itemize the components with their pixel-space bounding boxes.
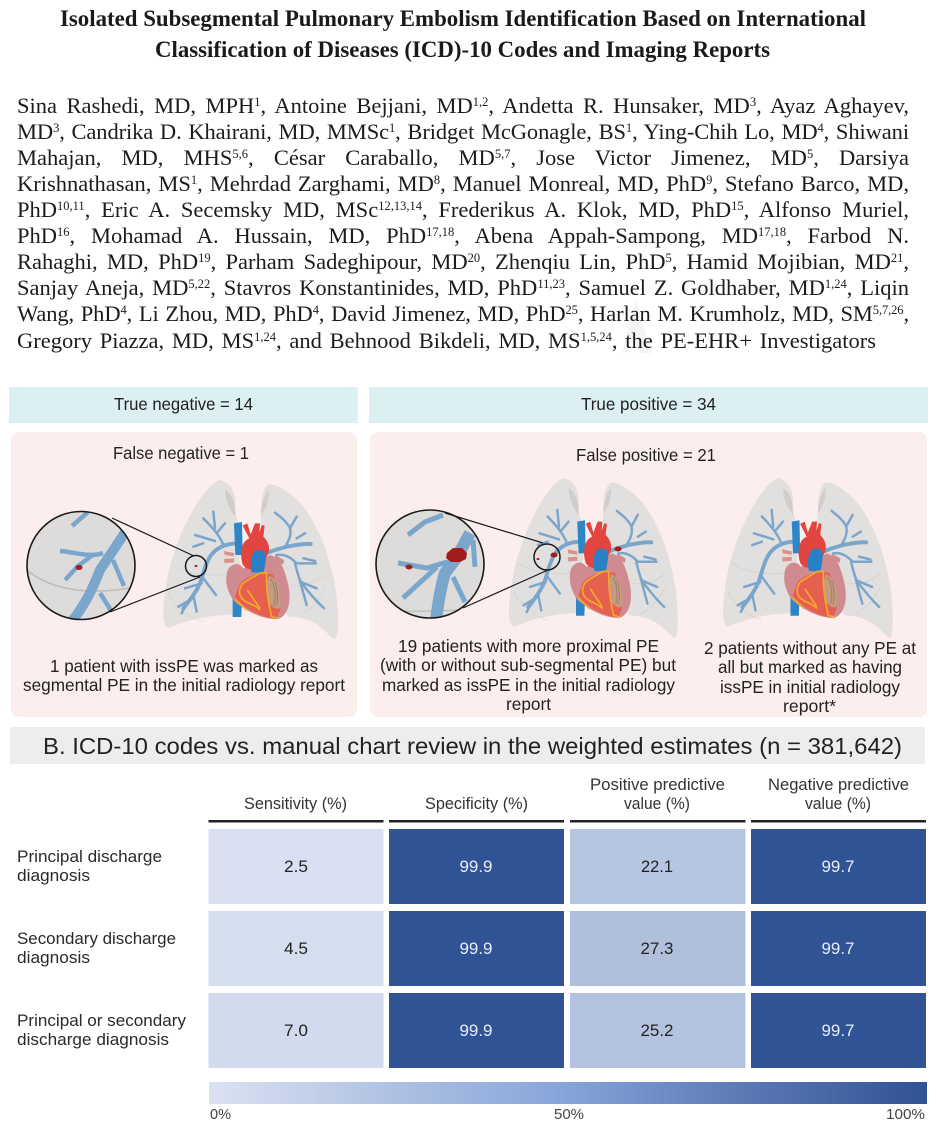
row: principal or secondary discharge diagnosis: 7.0 bbox=[284, 1022, 308, 1040]
caption: 19 patients: 19 patients with more proximal PE bbox=[398, 636, 659, 656]
column headers: Specificity (%) bbox=[425, 795, 528, 813]
row: principal discharge diagnosis: 99.9 bbox=[460, 858, 492, 876]
false negative caption bbox=[23, 656, 345, 695]
author list: Mahajan, MD, MHS5,6, César Caraballo, MD5,7, Jose Victor Jimenez, MD5, Darsiya bbox=[17, 145, 909, 170]
row: secondary discharge diagnosis: 27.3 bbox=[640, 940, 674, 958]
author list: Krishnathasan, MS1, Mehrdad Zarghami, MD8, Manuel Monreal, MD, PhD9, Stefano Barco, MD, bbox=[17, 171, 909, 196]
row: principal discharge diagnosis: 99.7 bbox=[822, 858, 854, 876]
icon: lungs and heart with proximal clots bbox=[509, 478, 678, 637]
heading: section B bbox=[10, 727, 925, 764]
author list: PhD10,11, Eric A. Secemsky MD, MSc12,13,14, Frederikus A. Klok, MD, PhD15, Alfonso Muriel, bbox=[17, 197, 909, 222]
column headers: Sensitivity (%) bbox=[244, 795, 347, 813]
row: principal discharge diagnosis: 2.5 bbox=[284, 858, 308, 876]
panel: true negative banner bbox=[9, 387, 358, 423]
column headers: value (%) bbox=[624, 795, 690, 813]
caption: 2 patients: all but marked as having bbox=[718, 657, 902, 677]
icon: lungs and heart without embolism bbox=[723, 478, 893, 637]
caption: 2 patients: issPE in initial radiology bbox=[720, 677, 900, 697]
false negative caption: 1 patient with issPE was marked as bbox=[50, 656, 318, 676]
row: principal or secondary discharge diagnosis: 99.9 bbox=[460, 1022, 492, 1040]
icon: lungs and heart bbox=[163, 480, 338, 639]
panel: false positive bbox=[370, 432, 927, 717]
row labels: discharge diagnosis bbox=[17, 1031, 169, 1049]
icon: magnified proximal clot bbox=[376, 510, 560, 620]
row: principal or secondary discharge diagnosis bbox=[208, 993, 926, 1068]
row: principal discharge diagnosis: 22.1 bbox=[641, 858, 673, 876]
row labels: Principal or secondary bbox=[17, 1012, 187, 1030]
row labels: diagnosis bbox=[17, 867, 90, 885]
caption: 19 patients: (with or without sub-segmental PE) but bbox=[380, 655, 676, 675]
author list: Rahaghi, MD, PhD19, Parham Sadeghipour, MD20, Zhenqiu Lin, PhD5, Hamid Mojibian, MD21, bbox=[17, 249, 909, 274]
caption: 2 patients: report* bbox=[783, 696, 836, 716]
author list: Sanjay Aneja, MD5,22, Stavros Konstantinides, MD, PhD11,23, Samuel Z. Goldhaber, MD1,24, Liqin bbox=[17, 275, 909, 300]
caption: 2 patients: 2 patients without any PE at bbox=[704, 638, 916, 658]
title: Isolated Subsegmental Pulmonary Embolism Identification Based on International bbox=[60, 6, 866, 31]
caption: 19 patients: marked as issPE in the initial radiology bbox=[382, 675, 675, 695]
row: secondary discharge diagnosis: 99.7 bbox=[822, 940, 854, 958]
caption: 19 patients bbox=[380, 636, 676, 714]
author list: Gregory Piazza, MD, MS1,24, and Behnood Bikdeli, MD, MS1,5,24, the PE-EHR+ Investigators bbox=[17, 328, 876, 353]
colour scale legend bbox=[209, 1082, 927, 1123]
panel: false negative bbox=[11, 432, 357, 717]
column headers: Positive predictive bbox=[590, 776, 725, 794]
row: principal discharge diagnosis bbox=[208, 829, 926, 904]
author list: MD3, Candrika D. Khairani, MD, MMSc1, Bridget McGonagle, BS1, Ying-Chih Lo, MD4, Shiwani bbox=[17, 119, 909, 144]
row labels: diagnosis bbox=[17, 949, 90, 967]
caption: 19 patients: report bbox=[506, 694, 551, 714]
false negative heading: False negative = 1 bbox=[113, 443, 249, 463]
title bbox=[60, 6, 866, 62]
row labels bbox=[17, 848, 187, 1049]
colour scale legend: 100% bbox=[886, 1106, 925, 1123]
colour scale legend: 50% bbox=[554, 1106, 584, 1123]
column headers: Negative predictive bbox=[768, 776, 909, 794]
row labels: Principal discharge bbox=[17, 848, 162, 866]
panel: true positive banner bbox=[369, 387, 928, 423]
icon: magnified subsegmental clot bbox=[27, 512, 206, 620]
title: Classification of Diseases (ICD)-10 Codes and Imaging Reports bbox=[155, 37, 770, 62]
row: secondary discharge diagnosis: 4.5 bbox=[284, 940, 308, 958]
column headers: value (%) bbox=[805, 795, 871, 813]
false positive heading: False positive = 21 bbox=[576, 445, 716, 465]
caption: 2 patients bbox=[704, 638, 916, 716]
false negative caption: segmental PE in the initial radiology report bbox=[23, 675, 345, 695]
heatmap table bbox=[17, 776, 926, 1068]
watermark bbox=[622, 300, 652, 353]
column headers bbox=[208, 776, 926, 822]
author list bbox=[17, 93, 909, 353]
row: secondary discharge diagnosis: 99.9 bbox=[460, 940, 492, 958]
colour scale legend: 0% bbox=[210, 1106, 231, 1123]
row: principal or secondary discharge diagnosis: 25.2 bbox=[640, 1022, 674, 1040]
author list: Wang, PhD4, Li Zhou, MD, PhD4, David Jimenez, MD, PhD25, Harlan M. Krumholz, MD, SM5,7,26, bbox=[17, 301, 909, 326]
heading: section B: B. ICD-10 codes vs. manual chart review in the weighted estimates (n = 381,642) bbox=[43, 733, 902, 759]
row: secondary discharge diagnosis bbox=[208, 911, 926, 986]
panel: true negative banner: True negative = 14 bbox=[114, 394, 253, 414]
author list: PhD16, Mohamad A. Hussain, MD, PhD17,18, Abena Appah-Sampong, MD17,18, Farbod N. bbox=[17, 223, 909, 248]
row labels: Secondary discharge bbox=[17, 930, 176, 948]
author list: Sina Rashedi, MD, MPH1, Antoine Bejjani, MD1,2, Andetta R. Hunsaker, MD3, Ayaz Aghayev, bbox=[17, 93, 909, 118]
row: principal or secondary discharge diagnosis: 99.7 bbox=[822, 1022, 854, 1040]
panel: true positive banner: True positive = 34 bbox=[581, 394, 716, 414]
